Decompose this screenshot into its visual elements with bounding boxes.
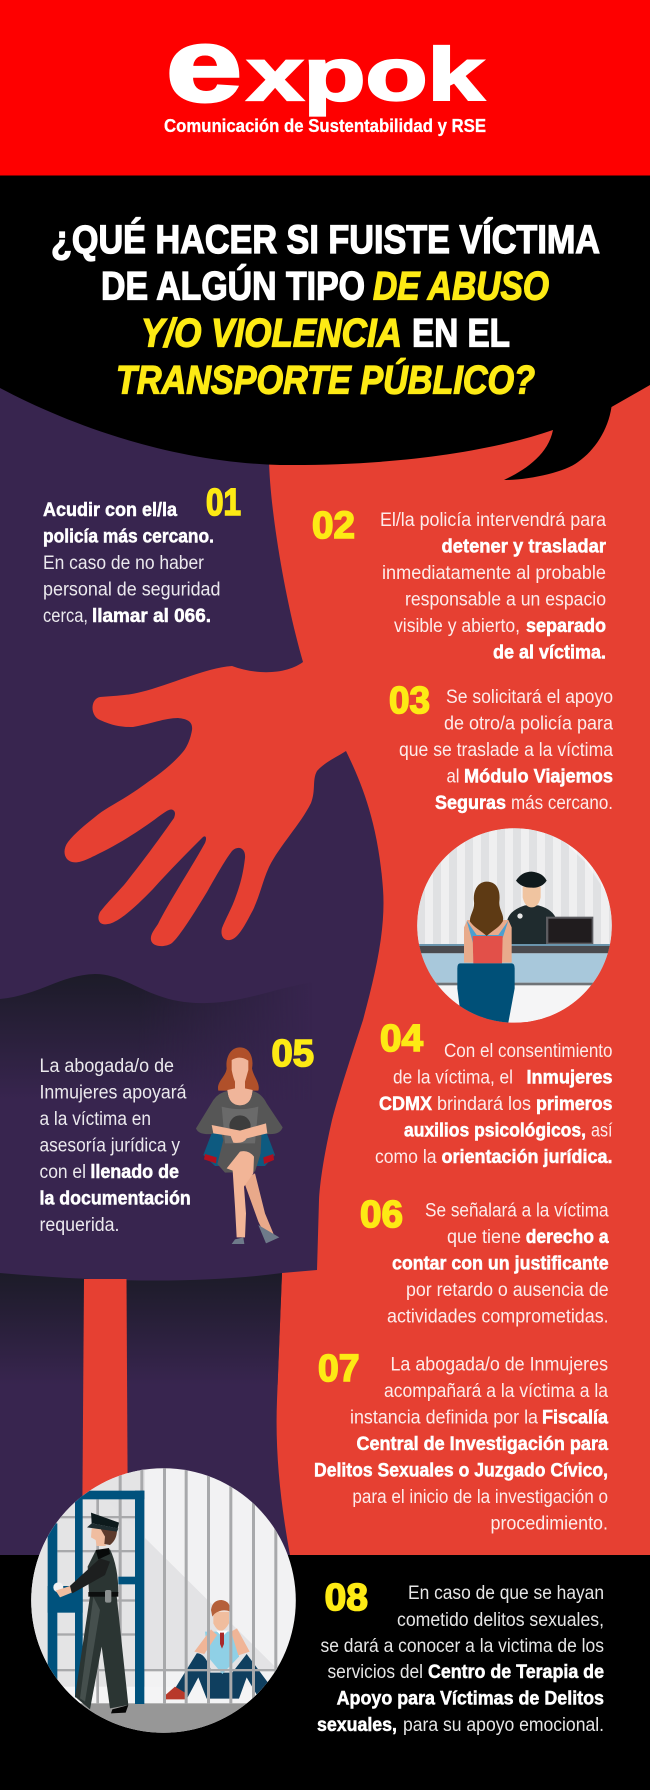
text 08: cometido delitos sexuales,: [397, 1610, 604, 1631]
text 02: responsable a un espacio: [405, 590, 606, 610]
step 02: [312, 505, 607, 664]
illustration: officer closing cell door with man seated inside: [31, 1468, 296, 1733]
chair: [203, 1113, 275, 1166]
title: TRANSPORTE PÚBLICO?: [116, 356, 535, 402]
text 07: Central de Investigación para: [356, 1434, 608, 1455]
text 05: llenado de: [90, 1162, 179, 1183]
step 05: [40, 1033, 314, 1236]
number 06: 06: [360, 1194, 403, 1236]
illustration: seated lawyer: [196, 1047, 283, 1244]
wall: [417, 828, 613, 945]
text 08: En caso de que se hayan: [408, 1583, 604, 1604]
cell bars: [50, 1468, 278, 1704]
monitor: [546, 916, 594, 944]
woman from behind: [464, 882, 512, 963]
text 07: acompañará a la víctima a la: [384, 1381, 608, 1402]
seated man: [165, 1600, 269, 1699]
text 03: [399, 687, 613, 814]
text 08: sexuales,: [317, 1715, 397, 1736]
text 07: instancia definida por la: [350, 1408, 538, 1428]
text 03: más cercano.: [511, 793, 613, 814]
dress and arms: [196, 1091, 283, 1173]
shoe: [111, 1705, 128, 1713]
step 07: [314, 1348, 608, 1534]
header: red band with logo: [0, 0, 650, 176]
police officer: [53, 1513, 128, 1713]
text 05: asesoría jurídica y: [40, 1136, 180, 1156]
background: red body: [0, 175, 650, 1555]
counter: [417, 944, 613, 985]
text 05: La abogada/o de: [40, 1056, 174, 1077]
text 06: que tiene: [447, 1227, 521, 1248]
text 01: policía más cercano.: [43, 526, 214, 548]
number 01: 01: [206, 482, 241, 524]
text 08: [317, 1583, 604, 1736]
logo tagline: Comunicación de Sustentabilidad y RSE: [164, 116, 486, 136]
number 03: 03: [389, 680, 430, 722]
text 01: En caso de no haber: [43, 553, 205, 574]
hair: [218, 1047, 259, 1091]
chair back seen through: [222, 1107, 258, 1143]
logo: expok: xpok: [247, 33, 485, 116]
text 04: Con el consentimiento: [444, 1041, 612, 1062]
text 01: personal de seguridad: [43, 580, 220, 600]
text 05: Inmujeres apoyará: [40, 1082, 187, 1104]
text 06: [387, 1201, 609, 1328]
text 08: para su apoyo emocional.: [403, 1715, 604, 1736]
text 04: como la: [375, 1147, 437, 1168]
step 08: [317, 1577, 604, 1736]
chair back: [457, 963, 515, 1023]
legs: [75, 1596, 128, 1709]
police officer: [507, 872, 557, 944]
torso: [88, 1549, 118, 1593]
text 04: orientación jurídica.: [442, 1147, 612, 1168]
text 08: servicios del: [328, 1662, 423, 1683]
number 04: 04: [380, 1018, 423, 1060]
text 04: auxilios psicológicos,: [404, 1120, 586, 1142]
text 02: de al víctima.: [493, 642, 606, 664]
text 07: [314, 1355, 608, 1534]
title: DE ABUSO: [373, 264, 549, 308]
title: [51, 217, 600, 402]
speech bubble: black title background: [0, 175, 650, 480]
text 08: se dará a conocer a la victima de los: [320, 1636, 604, 1657]
text 07: Fiscalía: [542, 1408, 608, 1428]
text 04: brindará los: [437, 1094, 531, 1115]
text 01: cerca,: [43, 606, 88, 627]
text 01: [43, 500, 220, 627]
text 02: visible y abierto,: [394, 616, 520, 637]
text 04: primeros: [536, 1094, 612, 1115]
cap: [91, 1513, 119, 1528]
text 03: Seguras: [435, 793, 506, 814]
title: Y/O VIOLENCIA: [141, 312, 402, 356]
text 01: Acudir con el/la: [43, 500, 177, 521]
text 02: El/la policía intervendrá para: [380, 510, 606, 531]
text 01: llamar al 066.: [92, 606, 211, 627]
head: [91, 1528, 106, 1546]
step 04: [375, 1018, 613, 1168]
text 02: detener y trasladar: [442, 536, 607, 558]
text 07: Delitos Sexuales o Juzgado Cívico,: [314, 1460, 608, 1482]
text 05: a la víctima en: [40, 1109, 151, 1130]
text 06: actividades comprometidas.: [387, 1307, 609, 1328]
text 07: La abogada/o de Inmujeres: [390, 1355, 608, 1376]
text 05: requerida.: [40, 1215, 120, 1236]
text 02: separado: [526, 616, 606, 637]
text 03: que se traslade a la víctima: [399, 740, 613, 761]
number 08: 08: [325, 1577, 368, 1619]
title: EN EL: [412, 312, 510, 356]
text 08: Centro de Terapia de: [428, 1662, 604, 1683]
text 06: contar con un justificante: [392, 1254, 609, 1275]
face, neck and chest: [227, 1058, 253, 1106]
forearms and hands: [212, 1123, 267, 1143]
text 06: Se señalará a la víctima: [425, 1201, 609, 1222]
text 06: derecho a: [526, 1227, 609, 1248]
text 04: [375, 1041, 613, 1168]
text 08: Apoyo para Víctimas de Delitos: [337, 1688, 604, 1710]
text 05: [40, 1056, 191, 1236]
text 07: para el inicio de la investigación o: [352, 1487, 608, 1508]
logo: expok: e: [166, 8, 242, 124]
text 07: procedimiento.: [490, 1514, 608, 1534]
text 03: al: [446, 766, 460, 788]
door knob and hand: [53, 1582, 63, 1592]
text 04: así: [591, 1120, 613, 1142]
number 05: 05: [272, 1033, 314, 1075]
number 02: 02: [312, 505, 355, 547]
cell door frame: [48, 1491, 144, 1704]
window glare: [564, 842, 606, 892]
text 04: de la víctima, el: [393, 1068, 513, 1088]
text 04: CDMX: [379, 1094, 432, 1115]
step 01: [43, 482, 241, 627]
wall and floor: [31, 1468, 296, 1733]
logo: expok: [166, 8, 485, 124]
text 03: Se solicitará el apoyo: [446, 687, 613, 708]
footer: black band: [0, 1555, 650, 1790]
text 03: de otro/a policía para: [444, 714, 613, 734]
text 05: la documentación: [40, 1188, 191, 1210]
silhouette: purple figure with reaching hand: [0, 380, 390, 1555]
silhouette: red gap between the legs: [82, 1279, 128, 1555]
text 05: con el: [40, 1162, 86, 1183]
step 03: [389, 680, 613, 814]
illustration: woman reporting to police officer at module: [417, 828, 613, 1023]
step 06: [360, 1194, 609, 1328]
number 07: 07: [318, 1348, 360, 1390]
text 06: por retardo o ausencia de: [406, 1280, 609, 1301]
belt and holster: [88, 1592, 118, 1597]
legs: [227, 1151, 279, 1244]
text 02: [380, 510, 607, 664]
text 04: Inmujeres: [526, 1068, 612, 1088]
text 02: inmediatamente al probable: [382, 563, 606, 584]
title: DE ALGÚN TIPO: [101, 262, 365, 308]
collar: [96, 1548, 110, 1559]
arm: [68, 1558, 110, 1593]
text 03: Módulo Viajemos: [464, 766, 613, 788]
